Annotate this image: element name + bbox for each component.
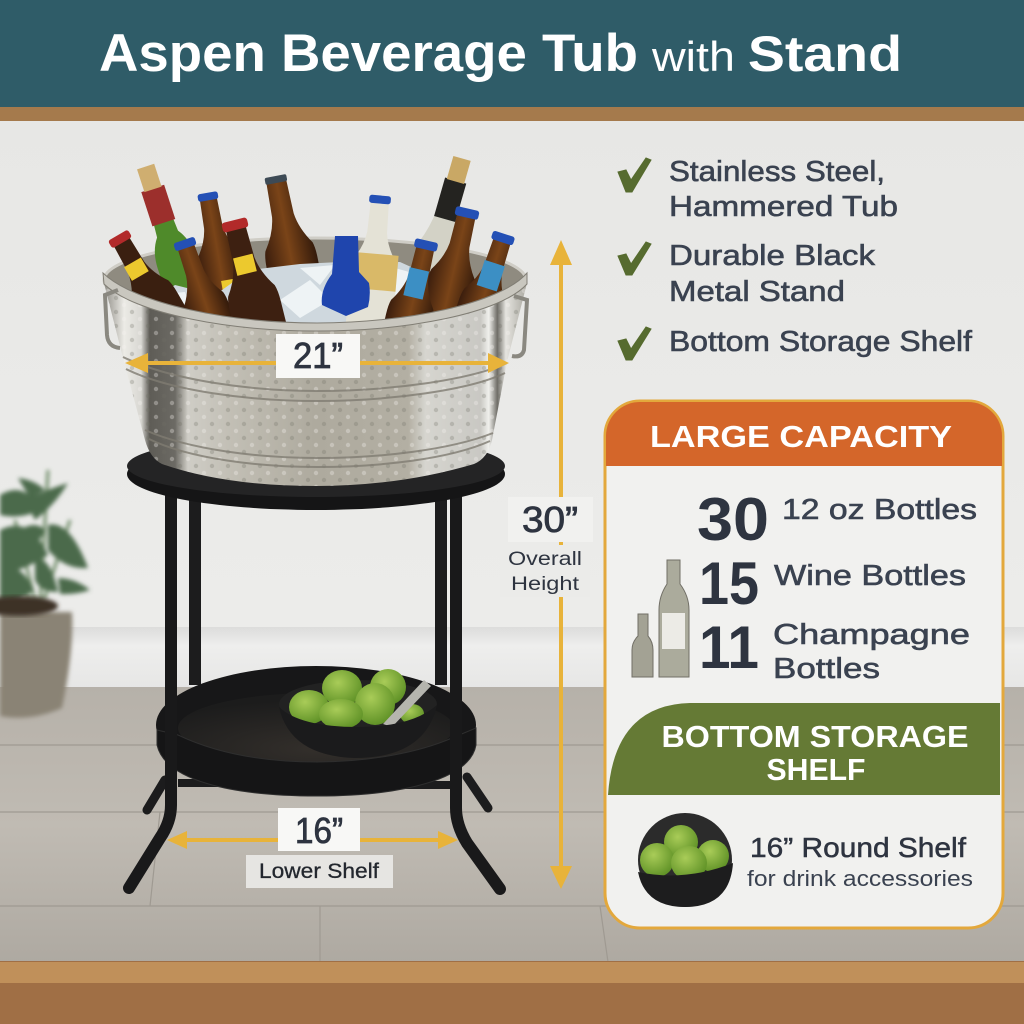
capacity 11 label line 2: Bottles [773, 653, 880, 685]
bottom wood trim [0, 961, 1024, 1024]
lower shelf [156, 666, 476, 796]
dark wine bottle [400, 153, 479, 318]
far right bottle [442, 227, 526, 366]
red-cap front bottle [209, 214, 295, 372]
shelf subtext: for drink accessories [747, 866, 973, 891]
dimension: 30 inch height: Height [511, 574, 580, 595]
dimension: 21 inch width: 21” [293, 335, 343, 376]
shelf text: 16” Round Shelf [750, 832, 966, 863]
left front bottle [98, 224, 204, 361]
panel: capacity and shelf [605, 401, 1003, 928]
dimension: 30 inch height: Overall [508, 549, 582, 570]
capacity 15 label: Wine Bottles [774, 560, 966, 592]
bowl with limes [279, 669, 437, 758]
tub handles [105, 290, 527, 356]
floor [0, 687, 1024, 963]
shelf header: BOTTOM STORAGE [662, 719, 968, 754]
shelf header: SHELF [766, 752, 866, 787]
header wood strip [0, 107, 1024, 121]
feature 2: Durable Black [669, 240, 876, 272]
capacity 11: 11 [699, 614, 759, 681]
feature 2 line 2: Metal Stand [669, 276, 845, 308]
capacity 15: 15 [699, 550, 759, 617]
check 2 [618, 242, 651, 275]
back amber bottle [250, 171, 329, 327]
stand: back legs [147, 495, 488, 810]
icon: bottles [632, 560, 689, 677]
capacity header: LARGE CAPACITY [650, 419, 952, 454]
capacity 30: 30 [697, 486, 769, 553]
wall background [0, 121, 1024, 631]
dimension: 16 inch lower shelf [167, 808, 458, 888]
tub interior [104, 238, 526, 322]
blue-label bottle [374, 235, 450, 377]
feature 1 line 2: Hammered Tub [669, 191, 898, 223]
dimension: 21 inch width [125, 334, 509, 378]
header banner [0, 0, 1024, 108]
feature 3: Bottom Storage Shelf [669, 326, 973, 358]
right amber bottle [414, 203, 491, 348]
baseboard [68, 627, 1024, 689]
stand: front legs [129, 495, 500, 889]
clear bottle [345, 193, 404, 332]
dimension: 30 inch height: 30” [522, 499, 578, 540]
potted plant [0, 470, 90, 718]
icon: bowl of limes [638, 813, 733, 907]
check 3 [618, 327, 651, 360]
bottles and ice [98, 153, 526, 377]
blue bottle [322, 236, 370, 316]
feature 1: Stainless Steel, [669, 156, 885, 188]
check 1 [618, 158, 651, 192]
title: Aspen Beverage Tub [99, 24, 638, 83]
ice [155, 262, 490, 325]
shelf header [608, 703, 1000, 795]
green wine bottle [127, 160, 214, 326]
blue-cap front bottle [163, 233, 246, 368]
dimension: 16 inch lower shelf: 16” [295, 810, 343, 851]
capacity header [605, 402, 1003, 466]
title suffix: with Stand [651, 26, 902, 82]
dimension: 30 inch height [500, 240, 593, 889]
hammered steel tub [103, 273, 527, 486]
rear blue-cap bottle [185, 189, 251, 322]
capacity 11 label: Champagne [773, 619, 970, 651]
stand ring [127, 435, 505, 510]
capacity 30 label: 12 oz Bottles [782, 494, 977, 526]
dimension: 16 inch lower shelf: Lower Shelf [259, 860, 379, 883]
feature list [618, 156, 973, 360]
